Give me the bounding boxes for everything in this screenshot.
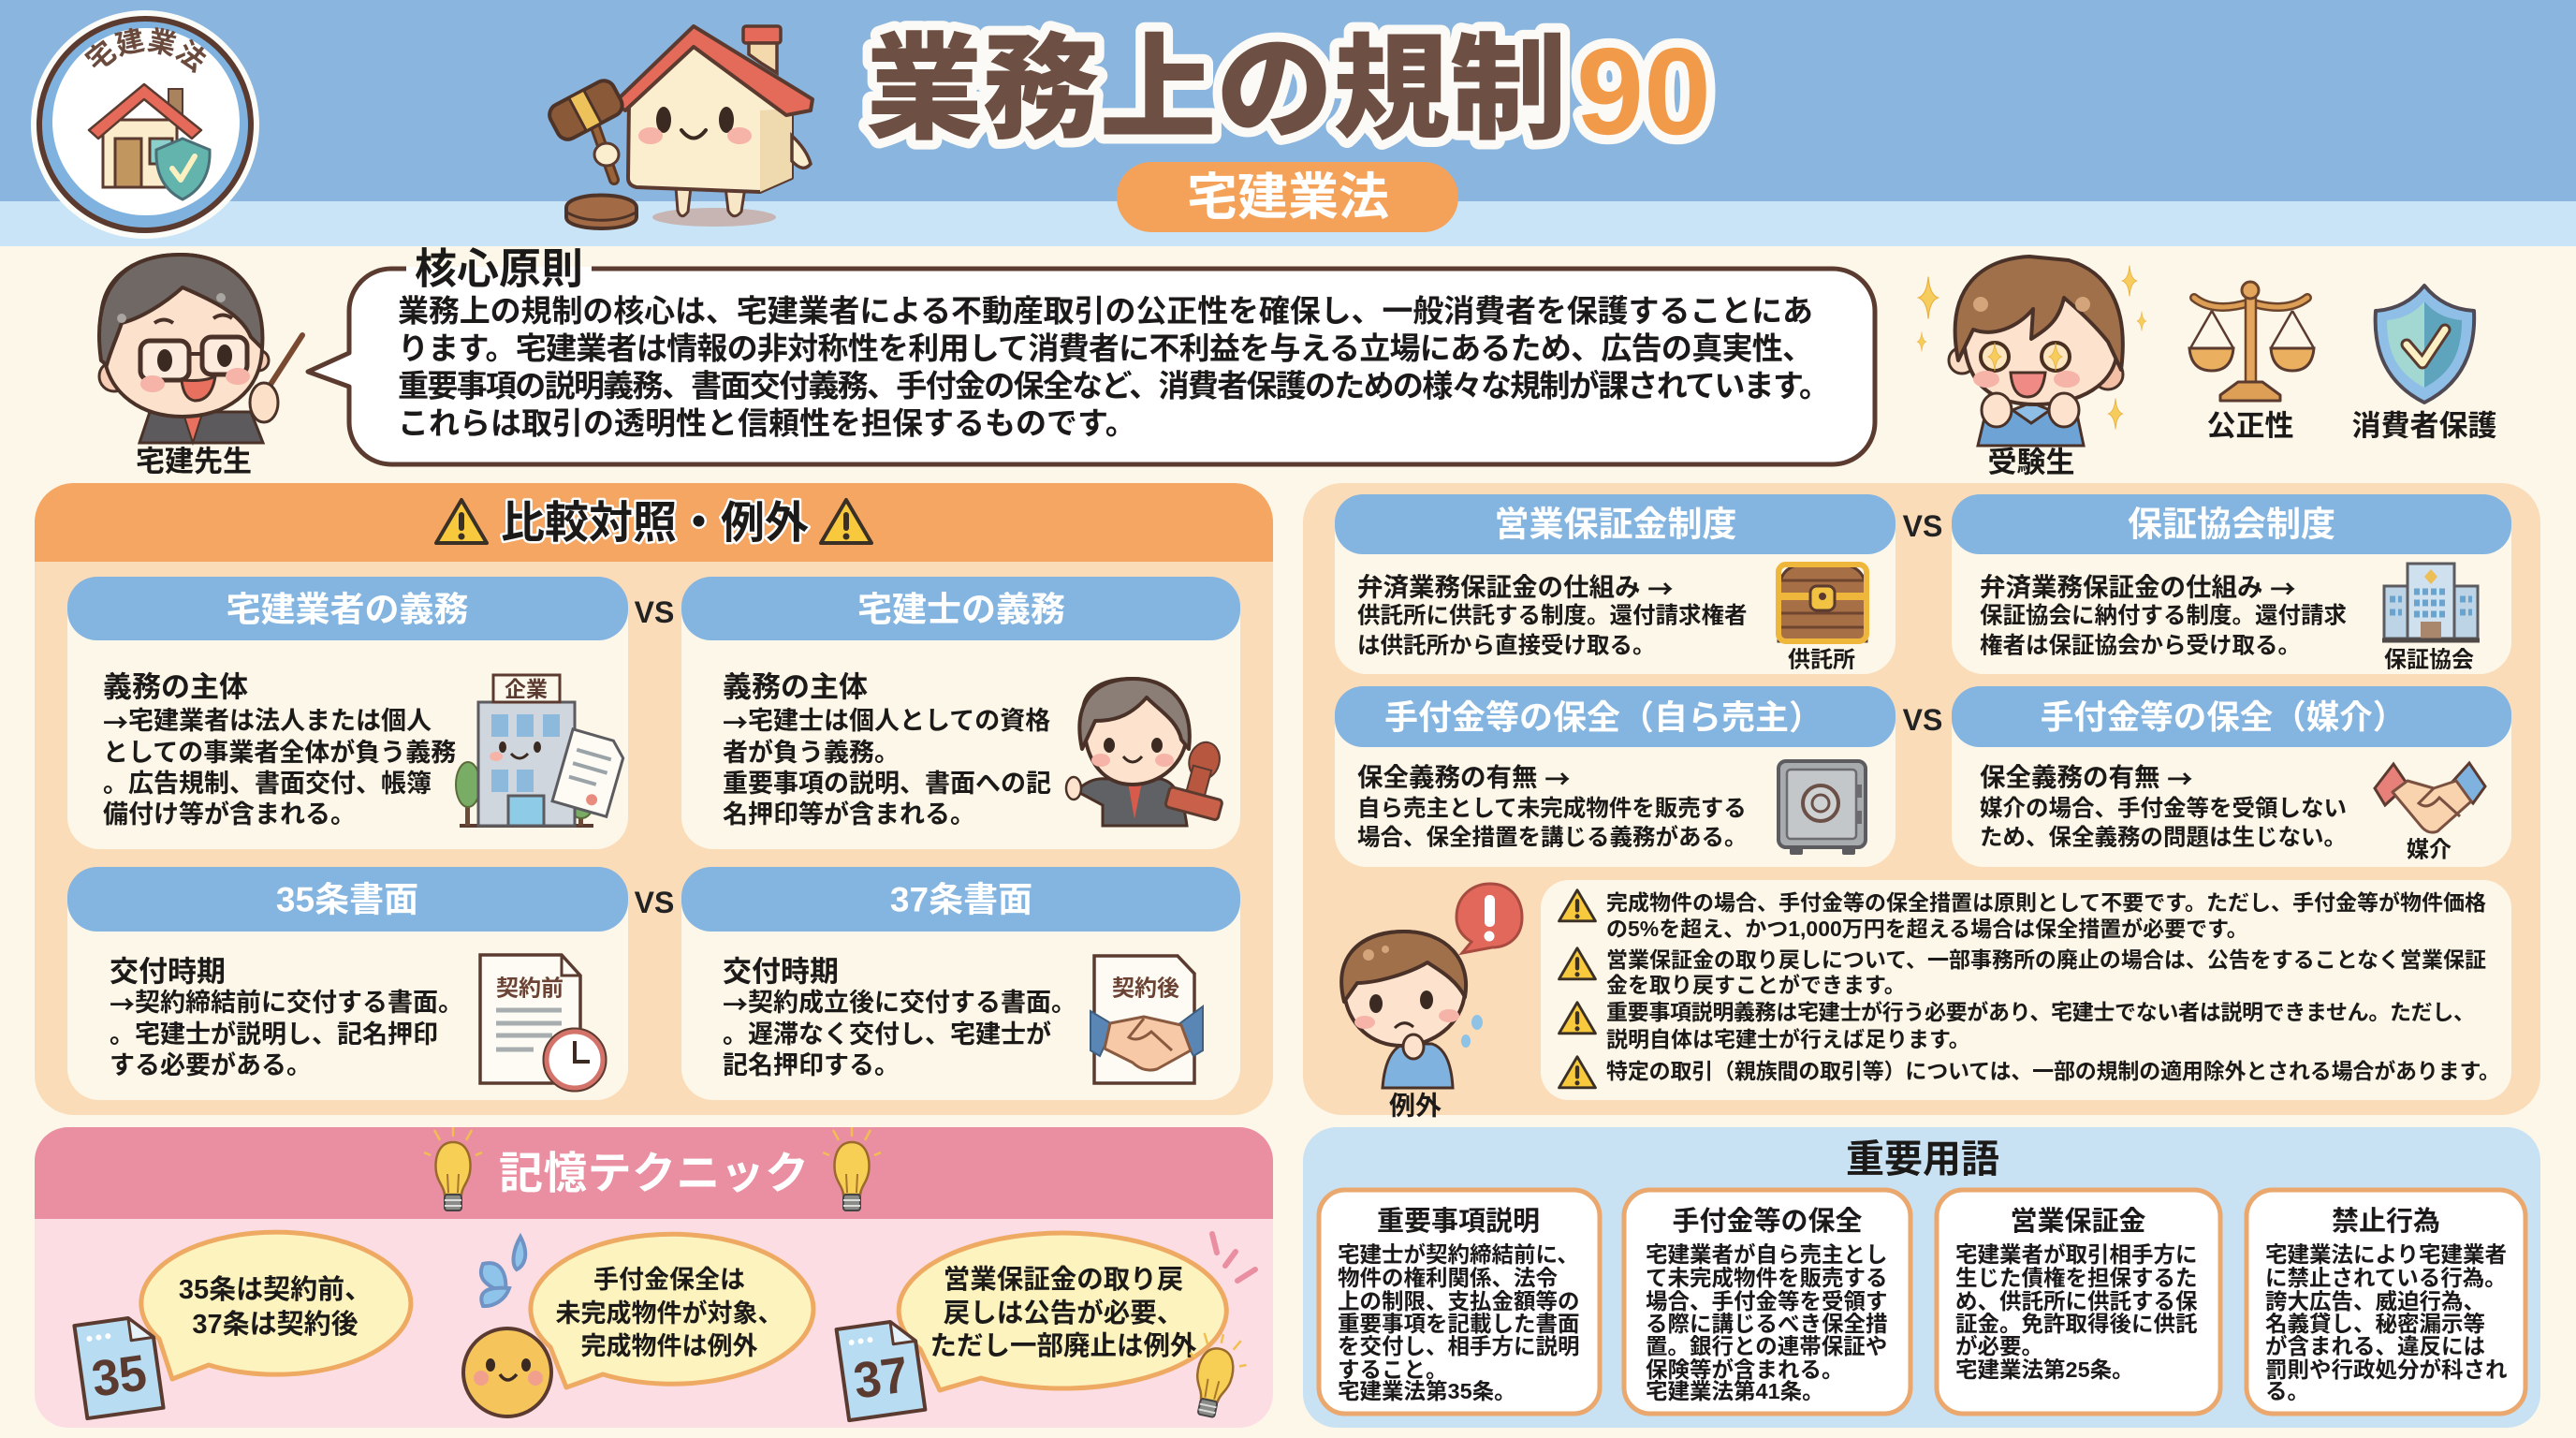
panel: exception list: の5%を超え、かつ1,000万円を超える場合は保全措置が必要です。	[1606, 917, 2248, 941]
callout: deposit protection: 手付金保全は	[593, 1266, 745, 1294]
panel: exception list: 重要事項説明義務は宅建士が行う必要があり、宅建士でない者は説明できません。ただし、	[1606, 1000, 2475, 1024]
card: article 35 document: 35条書面	[276, 880, 418, 919]
term card: important matters explanation: 重要事項を記載した書面	[1338, 1312, 1580, 1336]
panel: exception list: 特定の取引（親族間の取引等）については、一部の規制の適用除外とされる場合があります。	[1606, 1059, 2500, 1083]
term card: prohibited acts: る。	[2265, 1379, 2309, 1403]
card: article 37 document	[681, 867, 1240, 1100]
term card: business deposit: 証金。免許取得後に供託	[1955, 1312, 2198, 1336]
icon: document 35	[74, 1315, 164, 1418]
label: teacher: 宅建先生	[136, 446, 252, 477]
label: deposit office: 供託所	[1788, 648, 1855, 672]
term card: prohibited acts: 名義貸し、秘密漏示等	[2265, 1312, 2485, 1336]
icon: shield	[2376, 286, 2474, 403]
icon: association building	[2382, 564, 2480, 640]
vs marker row 1: VS	[1903, 509, 1942, 543]
card: dealer duties: 。広告規制、書面交付、帳簿	[103, 770, 432, 798]
card: deposit protection as seller	[1335, 686, 1895, 867]
card: article 37 document: 記名押印する。	[723, 1051, 900, 1079]
panel: exception list: 営業保証金の取り戻しについて、一部事務所の廃止の場合は、公告をすることなく営業保証	[1606, 947, 2486, 972]
vs marker row 1: VS	[635, 595, 674, 629]
icon: licensed agent with stamp	[1066, 679, 1237, 826]
callout: business deposit refund: 営業保証金の取り戻	[944, 1265, 1183, 1295]
card: dealer duties: としての事業者全体が負う義務	[103, 738, 456, 767]
heading: memory techniques	[424, 1127, 881, 1211]
card: article 37 document: 37条書面	[890, 880, 1032, 919]
icon: post-contract document with handshake	[1090, 956, 1203, 1083]
term card: deposit protection: 宅建業者が自ら売主とし	[1646, 1241, 1887, 1267]
term card: business deposit: 生じた債権を担保するた	[1955, 1266, 2198, 1290]
callout: deposit protection: 完成物件は例外	[580, 1332, 758, 1360]
callout: business deposit refund: ただし一部廃止は例外	[929, 1331, 1197, 1361]
text: core principle body: 重要事項の説明義務、書面交付義務、手付金の保全など、消費者保護のための様々な規制が課されています。	[398, 369, 1830, 403]
term card: deposit protection: 置。銀行との連帯保証や	[1646, 1334, 1887, 1358]
card: business deposit: 供託所に供託する制度。還付請求権者	[1357, 603, 1747, 629]
card: article 35 document: →契約締結前に交付する書面。	[110, 985, 463, 1020]
card: deposit protection as seller: 手付金等の保全（自ら売主）	[1384, 698, 1822, 736]
term card: deposit protection: 保険等が含まれる。	[1646, 1357, 1844, 1382]
term card: prohibited acts: 罰則や行政処分が科され	[2265, 1357, 2507, 1382]
icon: document 37	[837, 1319, 925, 1420]
term card: important matters explanation: 上の制限、支払金額等の	[1338, 1289, 1580, 1313]
label: association: 保証協会	[2384, 648, 2474, 672]
icon: emphasis marks	[1212, 1234, 1255, 1281]
icon: scales	[2189, 282, 2314, 401]
text: core principle body: ります。宅建業者は情報の非対称性を利用して消費者に不利益を与える立場にあるため、広告の真実性、	[398, 331, 1813, 365]
heading: key terms: 重要用語	[1846, 1137, 1999, 1181]
panel: exception list: 金を取り戻すことができます。	[1606, 973, 1906, 997]
character: student	[1917, 257, 2146, 446]
term card: important matters explanation: 宅建業法第35条。	[1338, 1379, 1516, 1403]
card: deposit protection as broker: ため、保全義務の問題は生じない。	[1980, 824, 2347, 850]
card: dealer duties	[67, 577, 628, 849]
card: article 35 document: 。宅建士が説明し、記名押印	[110, 1020, 438, 1049]
term card: prohibited acts: 宅建業法により宅建業者	[2265, 1242, 2507, 1267]
card: dealer duties: 義務の主体	[103, 670, 248, 704]
text: core principle body: これらは取引の透明性と信頼性を担保するものです。	[398, 406, 1136, 440]
callout: articles 35 and 37: 37条は契約後	[192, 1309, 359, 1340]
card: licensed agent duties: 重要事項の説明、書面への記	[723, 770, 1051, 798]
character: worried child	[1341, 884, 1522, 1088]
term card: important matters explanation: 物件の権利関係、法令	[1338, 1266, 1558, 1290]
vs marker row 2: VS	[635, 886, 674, 919]
card: article 37 document: 交付時期	[723, 955, 839, 989]
card: article 37 document: →契約成立後に交付する書面。	[723, 985, 1076, 1020]
term card: business deposit	[1937, 1190, 2220, 1414]
icon: company building	[456, 675, 627, 826]
callout: business deposit refund: 戻しは公告が必要、	[944, 1298, 1183, 1328]
icon: logo badge: 宅建業法	[84, 27, 206, 73]
term card: business deposit: 営業保証金	[2010, 1206, 2146, 1237]
panel: exception list: 完成物件の場合、手付金等の保全措置は原則として不要です。ただし、手付金等が物件価格	[1606, 890, 2486, 915]
term card: business deposit: め、供託所に供託する保	[1955, 1289, 2198, 1313]
heading: memory techniques: 記憶テクニック	[499, 1148, 809, 1198]
card: deposit protection as broker	[1952, 686, 2511, 867]
card: licensed agent duties	[681, 577, 1240, 849]
callout: deposit protection	[531, 1234, 813, 1387]
icon: document 35: 35	[88, 1344, 150, 1408]
term card: important matters explanation: すること。	[1338, 1357, 1447, 1382]
term card: deposit protection: る際に講じるべき保全措	[1646, 1312, 1887, 1336]
vs marker row 2: VS	[1903, 703, 1942, 737]
term card: prohibited acts: が含まれる、違反には	[2265, 1333, 2485, 1358]
title: 業務上の規制	[866, 26, 1567, 154]
card: deposit protection as broker: 媒介の場合、手付金等を受領しない	[1980, 796, 2347, 822]
term card: prohibited acts: に禁止されている行為。	[2265, 1266, 2507, 1290]
card: licensed agent duties: 者が負う義務。	[723, 738, 900, 767]
card: business deposit: 弁済業務保証金の仕組み →	[1357, 568, 1674, 606]
card: dealer duties: 備付け等が含まれる。	[103, 800, 356, 829]
title: 90	[1576, 22, 1711, 160]
card: deposit protection as seller: 自ら売主として未完成物件を販売する	[1357, 796, 1747, 822]
icon: house mascot with gavel	[546, 26, 812, 228]
icon: logo badge	[31, 10, 259, 239]
subtitle pill	[1117, 162, 1458, 232]
icon: water drops	[481, 1237, 525, 1306]
card: guarantee association: 保証協会に納付する制度。還付請求	[1980, 603, 2347, 629]
label: exception: 例外	[1389, 1092, 1442, 1120]
icon: post-contract document with handshake: 契約後	[1112, 976, 1179, 1002]
term card: business deposit: 宅建業者が取引相手方に	[1955, 1241, 2198, 1267]
card: licensed agent duties: 義務の主体	[723, 670, 868, 704]
text: core principle body: 業務上の規制の核心は、宅建業者による不動産取引の公正性を確保し、一般消費者を保護することにあ	[398, 294, 1813, 328]
card: licensed agent duties: →宅建士は個人としての資格	[723, 702, 1050, 740]
term card: prohibited acts: 禁止行為	[2332, 1206, 2440, 1237]
card: guarantee association	[1952, 494, 2511, 674]
heading: core principle: 核心原則	[415, 245, 583, 292]
term card: business deposit: 宅建業法第25条。	[1955, 1357, 2134, 1382]
card: licensed agent duties: 宅建士の義務	[857, 590, 1065, 629]
label: consumer protection: 消費者保護	[2351, 410, 2497, 442]
icon: treasure chest	[1778, 565, 1866, 641]
term card: important matters explanation: を交付し、相手方に説明	[1338, 1334, 1580, 1358]
subtitle pill: 宅建業法	[1187, 169, 1389, 226]
panel: memory techniques	[35, 1127, 1273, 1428]
panel: exception list	[1541, 880, 2511, 1100]
panel: key terms	[1303, 1127, 2540, 1428]
term card: deposit protection: 宅建業法第41条。	[1646, 1379, 1824, 1403]
term card: prohibited acts	[2247, 1190, 2525, 1414]
term card: important matters explanation	[1319, 1190, 1600, 1414]
icon: company building: 企業	[505, 677, 548, 701]
card: deposit protection as seller: 保全義務の有無 →	[1357, 758, 1571, 796]
panel: exception list: 説明自体は宅建士が行えば足ります。	[1606, 1027, 1970, 1051]
term card: business deposit: が必要。	[1955, 1333, 2043, 1358]
callout: articles 35 and 37	[141, 1232, 411, 1379]
card: guarantee association: 弁済業務保証金の仕組み →	[1980, 568, 2296, 606]
card: deposit protection as broker: 保全義務の有無 →	[1980, 758, 2193, 796]
callout: deposit protection: 未完成物件が対象、	[556, 1299, 783, 1328]
card: deposit protection as broker: 手付金等の保全（媒介）	[2041, 698, 2406, 736]
card: business deposit: は供託所から直接受け取る。	[1357, 633, 1655, 659]
card: article 35 document: 交付時期	[110, 955, 226, 989]
heading: comparison: 比較対照・例外	[501, 498, 809, 547]
text: core principle body	[398, 294, 1830, 440]
card: business deposit: 営業保証金制度	[1494, 506, 1737, 543]
term card: prohibited acts: 誇大広告、威迫行為、	[2265, 1289, 2485, 1313]
icon: document 37: 37	[850, 1346, 912, 1410]
character: teacher	[99, 255, 302, 443]
term card: important matters explanation: 宅建士が契約締結前に、	[1338, 1241, 1579, 1267]
card: guarantee association: 保証協会制度	[2128, 506, 2335, 543]
panel: comparison and exceptions	[35, 483, 1273, 1115]
callout: business deposit refund	[899, 1233, 1226, 1390]
card: article 35 document: する必要がある。	[110, 1050, 312, 1079]
icon: handshake	[2375, 763, 2485, 832]
term card: important matters explanation: 重要事項説明	[1377, 1206, 1540, 1237]
label: brokerage: 媒介	[2407, 837, 2452, 863]
card: licensed agent duties: 名押印等が含まれる。	[723, 800, 975, 829]
card: article 35 document	[67, 867, 628, 1100]
panel: core principle	[308, 245, 1875, 464]
card: deposit protection as seller: 場合、保全措置を講じる義務がある。	[1357, 824, 1747, 850]
icon: pre-contract document with clock	[480, 955, 607, 1092]
label: student: 受験生	[1988, 446, 2074, 479]
term card: deposit protection: 場合、手付金等を受領す	[1646, 1289, 1887, 1313]
card: article 37 document: 。遅滞なく交付し、宅建士が	[723, 1020, 1051, 1049]
panel: right comparison	[1303, 483, 2540, 1120]
callout: articles 35 and 37: 35条は契約前、	[179, 1274, 372, 1305]
header band	[0, 0, 2576, 246]
term card: deposit protection: 手付金等の保全	[1672, 1206, 1863, 1237]
card: dealer duties: 宅建業者の義務	[227, 590, 468, 629]
term card: deposit protection: て未完成物件を販売する	[1646, 1266, 1887, 1290]
card: business deposit	[1335, 494, 1895, 674]
card: guarantee association: 権者は保証協会から受け取る。	[1980, 633, 2301, 659]
card: dealer duties: →宅建業者は法人または個人	[103, 702, 432, 740]
icon: smiling coin	[463, 1328, 551, 1416]
icon: pre-contract document with clock: 契約前	[496, 976, 564, 1002]
term card: deposit protection	[1624, 1190, 1910, 1414]
icon: safe	[1778, 761, 1866, 855]
icon: idea bulb	[1178, 1328, 1251, 1422]
label: fairness: 公正性	[2207, 410, 2293, 442]
